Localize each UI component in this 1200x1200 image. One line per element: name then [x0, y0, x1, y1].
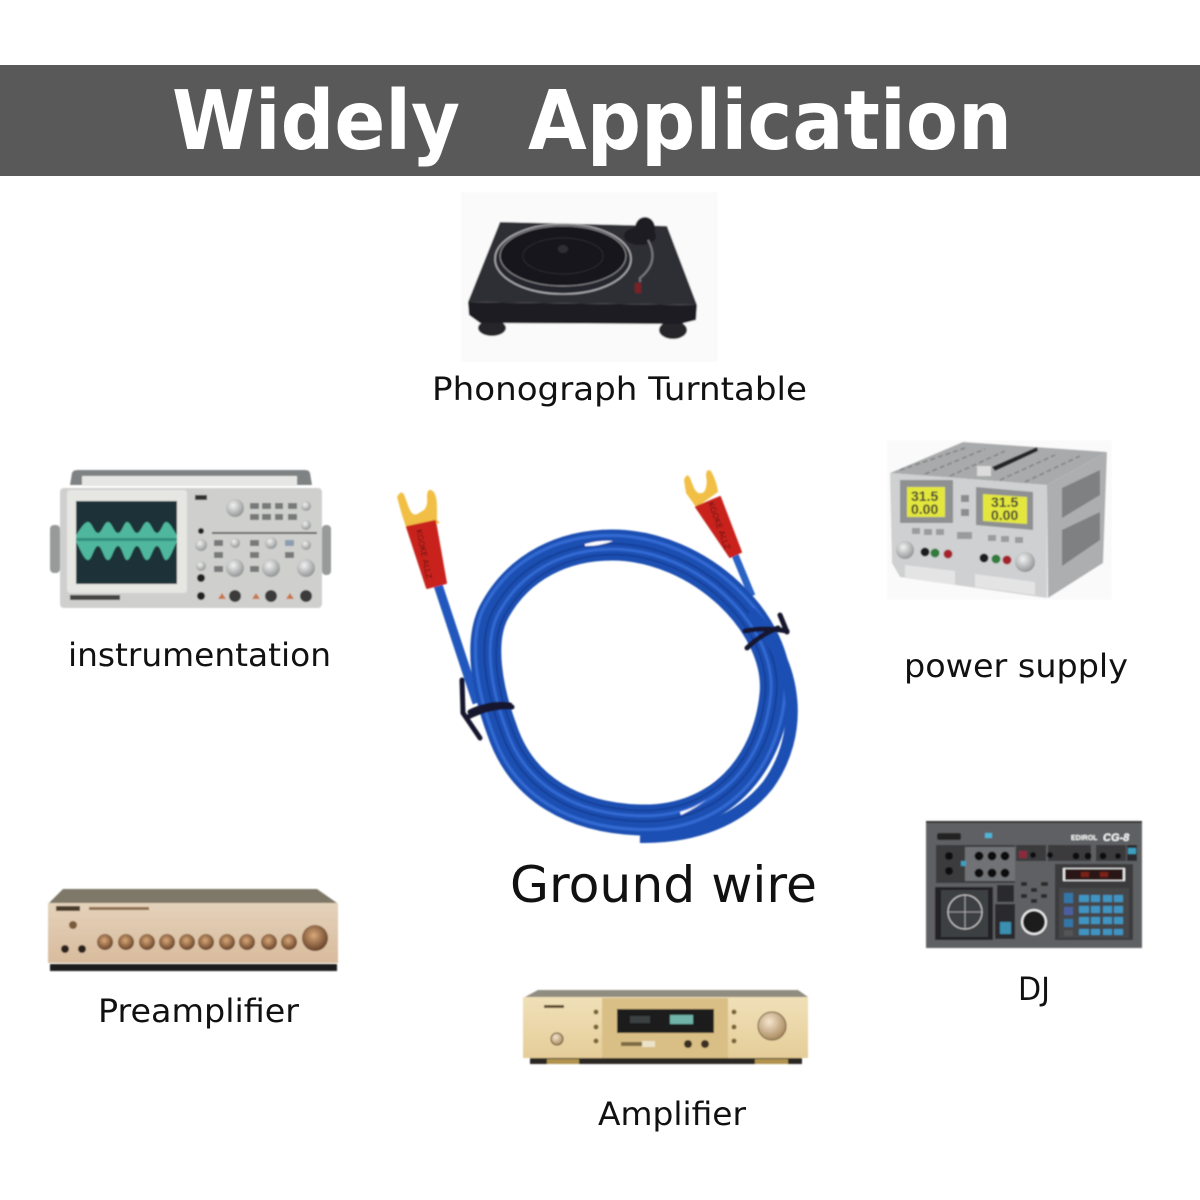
- icon: turntable: [461, 192, 718, 362]
- label: DJ: DJ: [1018, 970, 1050, 1008]
- readout left: 31.5: [911, 488, 938, 504]
- icon: DJ controller: CG-8: [1103, 832, 1130, 844]
- panel: amplifier: [523, 990, 808, 1133]
- title banner: [0, 65, 1200, 176]
- label: instrumentation: instrumentation: [68, 636, 331, 674]
- cable ties: [462, 615, 787, 738]
- label: Amplifier: Amplifier: [598, 1095, 747, 1133]
- panel: power supply: [887, 440, 1128, 685]
- title: Application: [528, 74, 1012, 169]
- panel: ground wire: [397, 470, 817, 914]
- icon: DJ controller: EDIROL: [1071, 835, 1098, 842]
- readout right: [991, 494, 1018, 523]
- readout left: [911, 488, 938, 517]
- panel: DJ: [926, 821, 1142, 1008]
- readout left: 0.00: [911, 501, 938, 517]
- left fork terminal: [397, 490, 446, 588]
- wire gaps: [585, 541, 752, 815]
- icon: preamplifier: [48, 889, 338, 971]
- readout right: 0.00: [991, 507, 1018, 523]
- right fork terminal: KGOKE ALLZ: [706, 501, 732, 552]
- label: power supply: power supply: [904, 647, 1128, 685]
- left fork terminal: KGOKE ALLZ: [414, 529, 433, 580]
- icon: oscilloscope: [50, 470, 331, 608]
- thin wire left: [438, 585, 477, 703]
- icon: amplifier: [523, 990, 808, 1064]
- image: blue ground wire coil: [397, 470, 792, 837]
- label: Phonograph Turntable: Phonograph Turntable: [432, 370, 807, 408]
- readout right: 31.5: [991, 494, 1018, 510]
- panel: preamplifier: [48, 889, 338, 1030]
- panel: instrumentation: [50, 470, 331, 674]
- panel: phonograph turntable: [432, 192, 807, 408]
- coil: [475, 535, 792, 837]
- icon: bench power supply: [887, 440, 1112, 600]
- icon: DJ controller: [926, 821, 1142, 948]
- title: Widely: [172, 74, 460, 169]
- right fork terminal: [684, 470, 741, 557]
- thin wire right: [735, 555, 752, 596]
- title: [172, 74, 1012, 169]
- label: Ground wire: Ground wire: [510, 856, 817, 914]
- label: Preamplifier: Preamplifier: [98, 992, 300, 1030]
